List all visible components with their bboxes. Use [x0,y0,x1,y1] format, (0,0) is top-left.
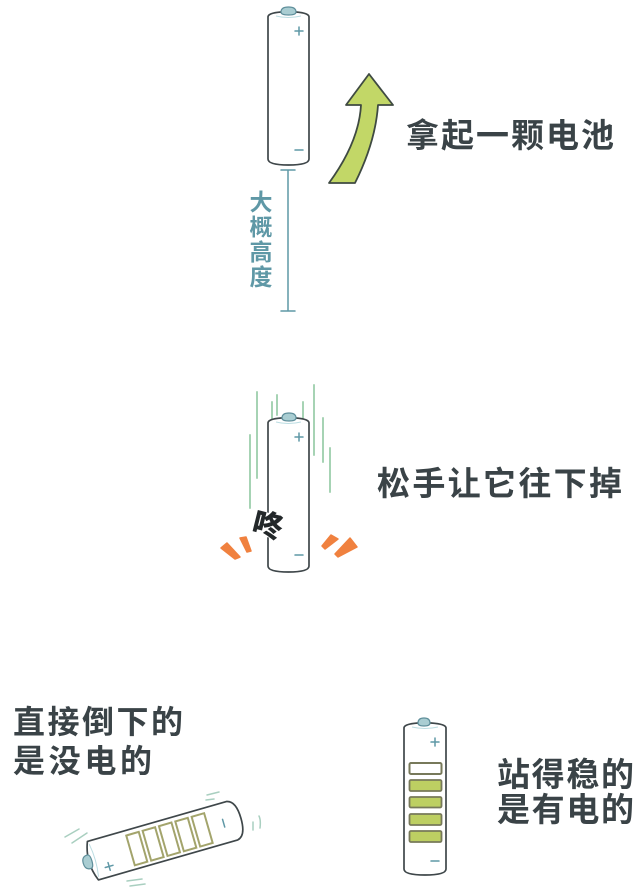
label: approximate height: 概 [250,214,272,240]
label: approximate height: 度 [250,264,272,290]
arrow: up [329,74,393,183]
battery: fallen over, empty [78,799,246,883]
heading: charged battery: 站得稳的 [497,756,634,793]
heading: dead battery [13,704,183,779]
sound effect: 咚 [249,507,286,546]
heading: charged battery [497,756,634,828]
heading: pick up a battery: 拿起一颗电池 [406,117,614,154]
battery: raised [268,7,309,165]
label: approximate height: 大 [250,189,272,215]
heading: let it drop: 松手让它往下掉 [377,465,622,502]
motion streaks [250,385,330,508]
label: approximate height [250,189,272,290]
impact marks [221,535,357,559]
charge cells: full [410,780,442,842]
heading: dead battery: 直接倒下的 [13,704,183,740]
battery: standing, charged [404,718,446,875]
height marker line [281,170,295,311]
charge cell: empty [410,763,442,774]
wobble lines [65,792,260,886]
battery: dropping [268,413,309,572]
heading: charged battery: 是有电的 [497,791,634,828]
label: approximate height: 高 [250,239,272,265]
heading: dead battery: 是没电的 [13,743,152,779]
